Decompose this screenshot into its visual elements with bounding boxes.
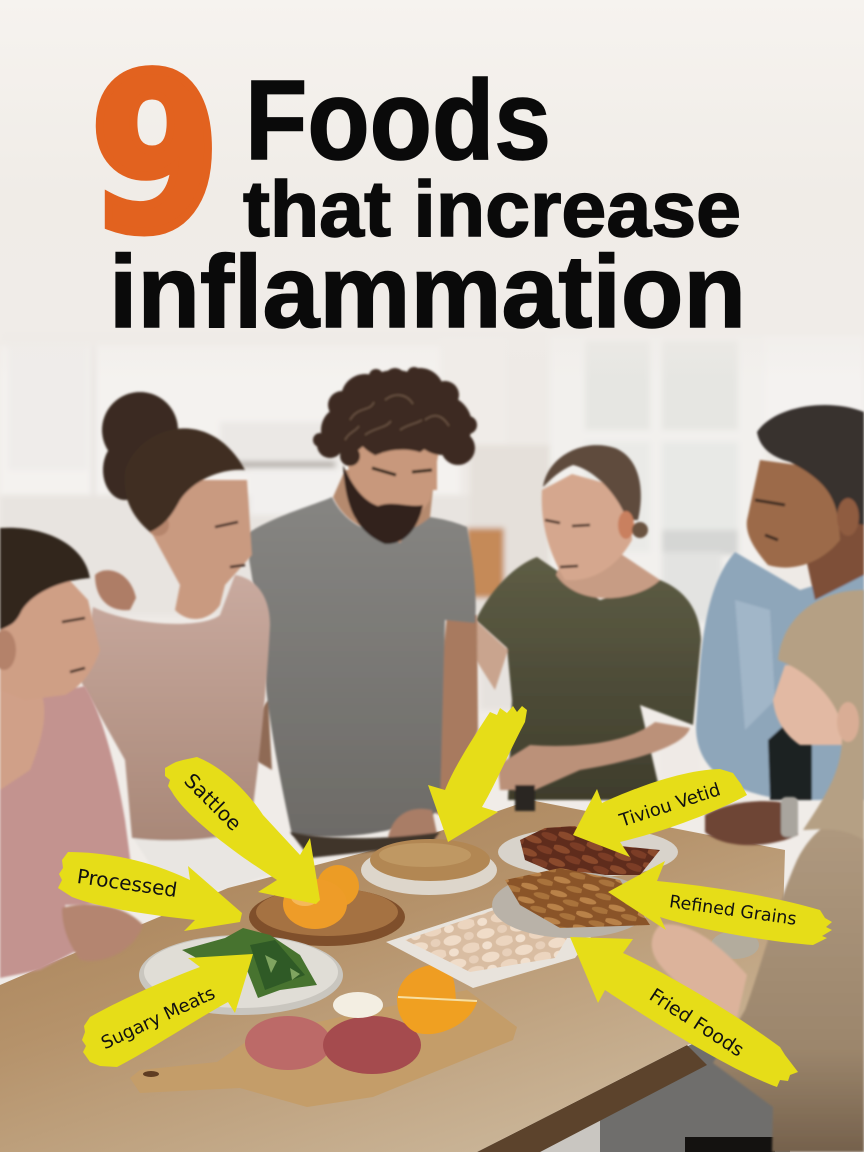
food: salad plate: [139, 928, 343, 1015]
person: man in denim jacket: [696, 405, 864, 800]
label: Processed: Processed: [76, 864, 179, 902]
person: woman in front left: [0, 528, 143, 978]
arrow: Fried Foods: [570, 937, 798, 1087]
label: Refined Grains: Refined Grains: [668, 892, 798, 930]
label: Sattloe: Sattloe: [180, 769, 246, 835]
food: patty plate: [361, 839, 497, 895]
person: woman in front right: [652, 590, 864, 1152]
hands resting on table: [290, 722, 798, 858]
person: woman in olive shirt: [475, 445, 701, 800]
arrow: Sattloe: [165, 757, 320, 904]
title number 9: 9: [90, 29, 220, 280]
food: wooden plate with oranges: [249, 865, 405, 946]
food: plates of fried meat: [492, 826, 759, 959]
person: woman with hair bun: [80, 392, 270, 895]
arrow: Refined Grains: [608, 861, 832, 945]
table: [0, 800, 790, 1152]
title line: inflammation: inflammation: [109, 234, 746, 349]
arrow: pointing at patty plate: [428, 706, 527, 842]
person: man in gray t-shirt: [245, 367, 478, 837]
label: Sugary Meats: Sugary Meats: [98, 983, 218, 1054]
arrow: Sugary Meats: [82, 954, 253, 1067]
title line: that increase: that increase: [243, 164, 741, 253]
label: Tiviou Vetid: Tiviou Vetid: [616, 779, 723, 832]
arrow: Processed: [58, 852, 242, 931]
food: white tray with pieces: [386, 905, 600, 988]
title: [90, 29, 746, 349]
food: cutting board with salami and orange: [130, 965, 517, 1107]
title line: Foods: Foods: [245, 57, 551, 183]
arrow: Tiviou Vetid: [573, 769, 747, 857]
label: Fried Foods: Fried Foods: [645, 984, 748, 1061]
